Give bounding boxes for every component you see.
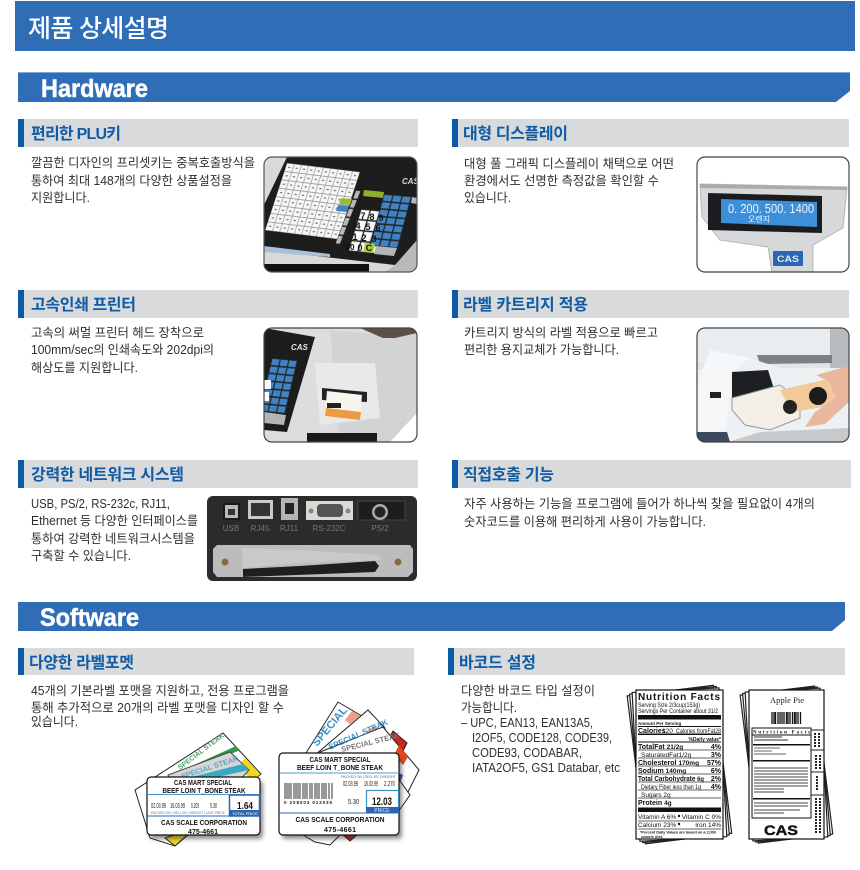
illustration: large label: PRICE [374,808,390,814]
illustration: large label: PACKED ON | SELL BY | WEIGHT [341,774,397,779]
illustration: large label: CAS SCALE CORPORATION [296,815,384,824]
photo: scale keyboard: 6 [375,223,381,233]
illustration: large label: 0 208003 012035 [284,800,332,805]
illustration: nutrition facts label stack: Calories fromFat28 [676,728,721,735]
illustration: large label: 16.03.99 [364,781,378,788]
illustration: nutrition facts label stack: Dietary Fiber less than 1g [641,784,701,791]
photo: display unit: CAS [777,254,799,264]
photo: interface ports: RJ11 [280,524,299,533]
illustration: apple pie label stack: CAS [764,822,798,838]
illustration: large label: 2.270 [384,781,395,788]
text: network description: 구축할 수 있습니다. [31,549,131,563]
text: label formats description: 통해 추가적으로 20개의 라벨 포맷을 디자인 할 수 [31,701,284,715]
panel: barcode settings [448,648,845,844]
text: barcode description: 가능합니다. [461,701,517,715]
heading: cartridge [452,290,849,318]
illustration: nutrition facts label stack: %Daily value* [688,737,721,743]
illustration: small label: PACKED ON | SELL BY | WEIGHT | UNIT PRICE [151,811,226,815]
photo: scale keyboard: 0 [357,243,363,253]
illustration: nutrition facts label stack: TotalFat 21/2g [638,744,683,751]
illustration: small label: 0.205 [191,803,199,810]
text: printer description [31,326,214,375]
text: barcode description: IATA2OF5, GS1 Databar, etc [472,761,620,775]
illustration: large label: CAS MART SPECIAL [310,757,371,764]
heading: label formats: 다양한 라벨포멧 [29,654,134,672]
panel: high-speed printer [18,290,418,442]
illustration: large label fan: SPECIAL STEAK [327,718,389,752]
photo: interface ports: PS/2 [371,524,389,533]
hardware section bar [18,72,850,103]
heading: direct call [452,460,851,488]
photo: scale keyboard: 2 [361,233,367,243]
photo: interface ports: RJ45 [251,524,270,533]
text: barcode description: – UPC, EAN13, EAN13A5, [461,716,593,730]
illustration: nutrition facts label stack: Cholesterol 170mg [638,760,699,767]
illustration: nutrition facts label stack: Amount Per Serving [638,721,682,726]
photo: cartridge loading [697,328,850,442]
text: cartridge description: 카트리지 방식의 라벨 적용으로 빠르고 [464,326,658,340]
heading: label formats [18,648,414,675]
illustration: nutrition facts label stack: 120 [662,728,673,735]
text: PLU keys description: 통하여 최대 148개의 다양한 상품설정을 [31,174,232,188]
text: barcode description: CODE93, CODABAR, [472,746,582,760]
illustration: nutrition facts label stack: SaturatedFat1/2g [641,752,692,759]
illustration: small label: 02.03.99 [151,803,166,810]
photo: scale keyboard [264,157,420,272]
photo: interface ports: RS-232C [313,524,346,533]
text: display description [464,157,674,205]
illustration: nutrition facts label stack: 6% [711,768,722,775]
illustration: nutrition facts label stack: 4% [711,744,722,751]
photo: scale keyboard: 8 [369,212,375,222]
illustration: large label: 12.03 [372,796,392,808]
illustration: small label fan: SPECIAL STEAK [180,754,240,781]
text: network description [31,497,198,563]
illustration: nutrition facts label stack: Vitamin A 6% [638,814,676,821]
text: network description: USB, PS/2, RS-232c, RJ11, [31,497,170,511]
text: direct call description: 자주 사용하는 기능을 프로그램에 들어가 하나씩 찾을 필요없이 4개의 [464,497,815,511]
heading: printer: 고속인쇄 프린터 [31,296,136,314]
illustration: nutrition facts label stack: 2% [711,776,722,783]
heading: cartridge: 라벨 카트리지 적용 [463,296,588,314]
illustration: nutrition facts label stack: 57% [707,760,722,767]
illustration: small label: 475-4661 [188,829,218,836]
illustration: nutrition facts label stack: Total Carbohydrate 6g [638,776,704,783]
illustration: apple pie label stack: Apple Pie [770,695,804,705]
panel: direct call function [452,460,851,529]
illustration: nutrition facts label stack: Vitamin C 0% [682,814,721,821]
illustration: large label fan: SPECIAL [310,704,350,749]
illustration: small label: 5.30 [210,803,217,810]
panel: large display [452,119,849,272]
photo: label printer [259,328,417,442]
illustration: small label: CAS MART SPECIAL [174,780,233,787]
illustration: nutrition facts label stack: 3% [711,752,722,759]
title banner: 제품 상세설명 [28,15,169,43]
illustration: nutrition facts label stack: Servings Per Container about 31/2 [638,708,718,715]
illustration: nutrition facts label stack: Nutrition Facts [638,692,720,703]
text: direct call description [464,497,815,529]
text: label formats description [31,684,289,729]
text: cartridge description [464,326,658,357]
photo: interface ports: USB [223,524,239,533]
photo: display unit [697,157,849,272]
photo: scale keyboard: 5 [365,222,371,232]
text: barcode description [461,684,620,775]
text: display description: 환경에서도 선명한 측정값을 확인할 수 [464,174,659,188]
illustration: nutrition facts label stack: Calcium 23% [638,822,677,829]
text: PLU keys description [31,156,255,205]
panel: convenient PLU keys [18,119,420,272]
heading: barcode [448,648,845,675]
illustration: nutrition facts label stack: Calories [638,728,666,735]
software section bar: Software [40,604,139,632]
photo: label printer: CAS [291,343,309,352]
panel: network system [18,460,418,581]
text: direct call description: 숫자코드를 이용해 편리하게 사용이 가능합니다. [464,515,706,529]
text: PLU keys description: 지원합니다. [31,191,90,205]
text: label formats description: 45개의 기본라벨 포맷을 지원하고, 전용 프로그램을 [31,684,289,698]
illustration: small label: TOTAL PRICE [232,811,258,816]
text: display description: 있습니다. [464,191,511,205]
heading: network: 강력한 네트워크 시스템 [31,466,184,484]
illustration: nutrition facts label stack: *Percent Daily Values are based on a 2,000 [640,830,717,834]
heading: PLU keys [18,119,418,147]
illustration: small label fan [135,732,263,846]
heading: network [18,460,418,488]
panel: label formats [18,648,419,846]
illustration: nutrition facts label stack: Sodium 140mg [638,768,686,775]
text: PLU keys description: 깔끔한 디자인의 프리셋키는 중복호출방식을 [31,156,255,170]
illustration: nutrition facts label stack: Sugars 2g [641,792,671,799]
illustration: small label: 16.03.99 [170,803,185,810]
heading: large display: 대형 디스플레이 [463,125,568,143]
photo: interface ports [207,496,417,581]
photo: scale keyboard: 1 [352,232,358,242]
text: network description: 통하여 강력한 네트워크시스템을 [31,532,195,546]
illustration: large label [279,753,399,835]
illustration: large label: 5.30 [348,799,359,806]
illustration: small label [147,777,260,836]
text: label formats description: 있습니다. [31,715,78,729]
illustration: small label: CAS SCALE CORPORATION [161,818,247,827]
text: printer description: 100mm/sec의 인쇄속도와 202dpi의 [31,343,214,357]
illustration: nutrition facts label stack: calorie diet. [641,834,663,839]
photo: scale keyboard: 00 [346,243,355,252]
illustration: large label: BEEF LOIN T_BONE STEAK [297,765,383,772]
hardware section bar: Hardware [41,75,148,103]
illustration: small label: 1.64 [237,801,253,812]
illustration: apple pie label stack [740,686,833,843]
illustration: large label fan [282,702,419,845]
text: barcode description: I2OF5, CODE128, CODE39, [472,731,612,745]
photo: display unit: 0. 200. 500. 1400 [728,201,814,216]
illustration: small label fan: SPECIAL STEAK [177,732,226,772]
illustration: nutrition facts label stack: Protein 4g [638,800,672,807]
text: display description: 대형 풀 그래픽 디스플레이 채택으로 어떤 [464,157,674,171]
illustration: nutrition facts label stack: Serving Size 2/3cup(153g) [638,702,700,709]
illustration: large label: 475-4661 [324,827,356,834]
illustration: large label: 02.03.99 [343,781,358,788]
heading: large display [452,119,849,147]
heading: direct call: 직접호출 기능 [463,466,554,484]
illustration: nutrition facts label stack: iron 14% [695,822,721,829]
text: cartridge description: 편리한 용지교체가 가능합니다. [464,343,619,357]
illustration: small label: BEEF LOIN T_BONE STEAK [162,788,246,795]
heading: printer [18,290,418,318]
photo: scale keyboard: CAS [402,177,420,186]
photo: scale keyboard: 4 [355,221,361,231]
photo: display unit: 오렌지 [748,214,770,224]
photo: scale keyboard: 3 [371,234,377,244]
photo: scale keyboard: 9 [378,213,384,223]
illustration: nutrition facts label stack: 4% [711,784,722,791]
panel: label cartridge [452,290,850,442]
illustration: apple pie label stack: Nutrition Facts [753,730,810,736]
heading: barcode: 바코드 설정 [459,654,536,672]
software section bar [18,602,845,632]
text: barcode description: 다양한 바코드 타입 설정이 [461,684,595,698]
title banner [15,1,855,51]
illustration: large label fan: SPECIAL STEAK [340,731,401,754]
illustration: nutrition facts label stack [627,685,732,844]
text: network description: Ethernet 등 다양한 인터페이스를 [31,514,198,528]
heading: PLU keys: 편리한 PLU키 [31,125,121,143]
photo: scale keyboard: C [366,243,373,253]
text: printer description: 해상도를 지원합니다. [31,361,138,375]
photo: scale keyboard: 7 [360,211,366,221]
text: printer description: 고속의 써멀 프린터 헤드 장착으로 [31,326,204,340]
